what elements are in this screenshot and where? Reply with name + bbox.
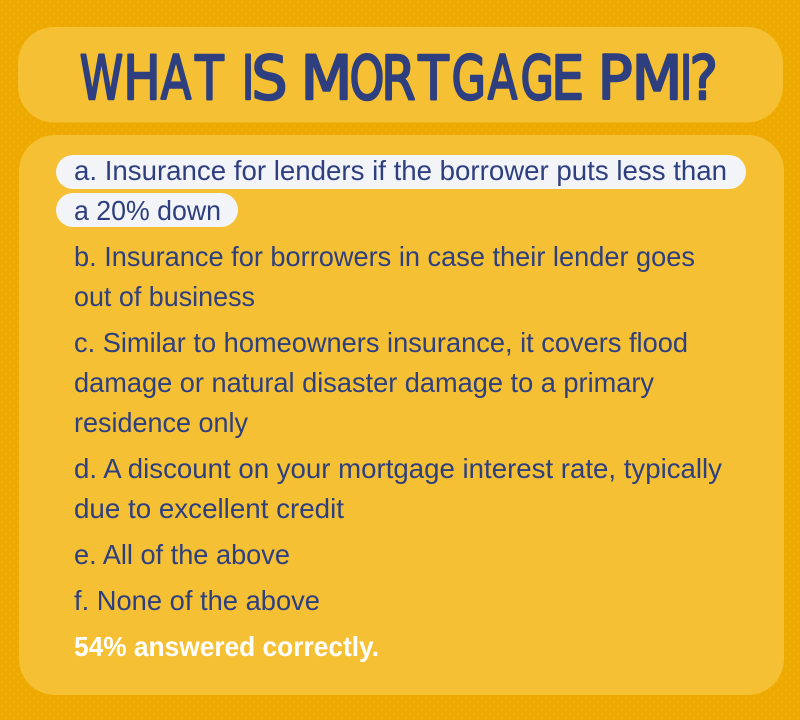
answer c: residence only: [74, 407, 248, 438]
title: T: [195, 43, 224, 114]
title: I: [242, 43, 254, 114]
title: S: [252, 43, 287, 114]
answer b: b. Insurance for borrowers in case their lender goes: [74, 241, 695, 272]
answer c: [74, 327, 688, 438]
answer a: highlighted correct answer: a. Insurance for lenders if the borrower puts less than: [74, 155, 727, 186]
answer b: out of business: [74, 281, 255, 312]
title: G: [521, 43, 554, 114]
title: W: [80, 43, 123, 114]
title: M: [301, 43, 352, 114]
answer a: highlighted correct answer: [56, 155, 746, 227]
title: E: [551, 43, 584, 114]
title: ?: [690, 43, 718, 114]
answer c: damage or natural disaster damage to a primary: [74, 367, 654, 398]
title panel: [18, 27, 783, 122]
answer c: c. Similar to homeowners insurance, it covers flood: [74, 327, 688, 358]
panel: quiz answers: [19, 135, 784, 695]
result statistic: 54% answered correctly.: [74, 631, 379, 662]
title: H: [123, 43, 161, 114]
title: T: [418, 43, 449, 114]
answer f: f. None of the above: [74, 585, 320, 616]
title: R: [381, 43, 416, 114]
title: O: [350, 43, 384, 114]
answer e: e. All of the above: [74, 539, 290, 570]
title: A: [488, 43, 517, 114]
answer b: [74, 241, 695, 312]
title: I: [680, 43, 692, 114]
answer d: due to excellent credit: [74, 493, 344, 524]
title: P: [598, 43, 633, 114]
title: M: [632, 43, 682, 114]
answer a: highlighted correct answer: a 20% down: [74, 195, 221, 226]
answer d: [74, 453, 722, 524]
answer d: d. A discount on your mortgage interest rate, typically: [74, 453, 722, 484]
title: A: [161, 43, 191, 114]
title: G: [452, 43, 486, 114]
